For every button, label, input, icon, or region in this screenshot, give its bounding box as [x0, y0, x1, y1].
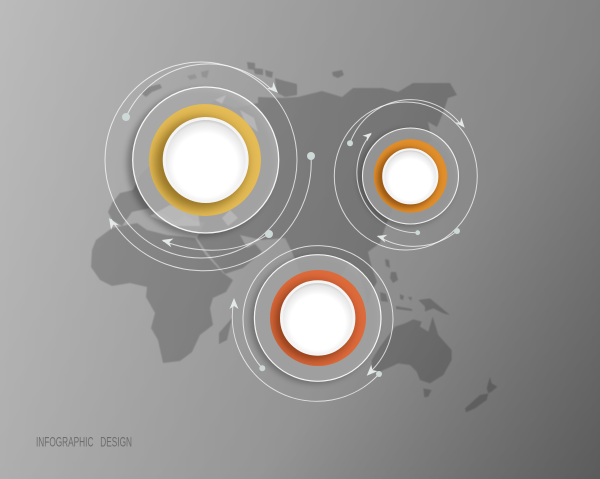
- group 3: red-orange circle: [250, 255, 381, 384]
- group 1 orbits: [105, 62, 311, 271]
- glass disc shadow: [250, 256, 378, 384]
- glass disc: [133, 87, 279, 233]
- red-orange ring shadow: [275, 282, 353, 360]
- group 2 orbits: [334, 100, 477, 250]
- map texture under glass: [150, 95, 258, 226]
- white disc: [164, 118, 247, 202]
- group 3 arrows and dots: [230, 298, 382, 379]
- orbit arc top: [243, 246, 393, 373]
- orbit arc outer: [111, 156, 311, 271]
- white disc: [281, 282, 354, 354]
- map: Eurasia: [108, 83, 457, 310]
- orange ring shadow: [378, 148, 438, 208]
- yellow ring shadow: [155, 117, 247, 209]
- glass disc: [362, 128, 458, 224]
- map: Australia and New Zealand: [372, 298, 497, 412]
- glass disc shadow: [127, 89, 275, 237]
- group 2: orange circle: [358, 128, 458, 227]
- orbit arc top: [350, 100, 462, 143]
- orbit arc bottom: [378, 231, 457, 246]
- world map: [91, 62, 497, 412]
- orbit ring: [105, 62, 297, 258]
- map: arctic and Asian islands: [141, 62, 412, 311]
- map: Africa: [91, 223, 233, 363]
- orbit ring: [334, 102, 477, 250]
- caption: INFOGRAPHIC DESIGN: [36, 434, 132, 450]
- orbit arc bottom: [163, 234, 269, 250]
- glass disc: [254, 255, 381, 381]
- group 3 orbits: [232, 246, 393, 401]
- orange ring: [374, 139, 447, 213]
- group 2 arrows and dots: [347, 117, 468, 242]
- map: Madagascar: [219, 318, 232, 344]
- yellow ring: [149, 104, 261, 216]
- red-orange ring: [270, 270, 366, 366]
- glass disc shadow: [358, 129, 456, 227]
- group 1 arrows and dots: [105, 82, 315, 247]
- white disc: [383, 149, 437, 203]
- orbit arc top: [126, 64, 272, 117]
- group 1: yellow circle: [127, 87, 279, 237]
- orbit arc bottom: [232, 300, 379, 401]
- orbit arc left: [357, 134, 418, 233]
